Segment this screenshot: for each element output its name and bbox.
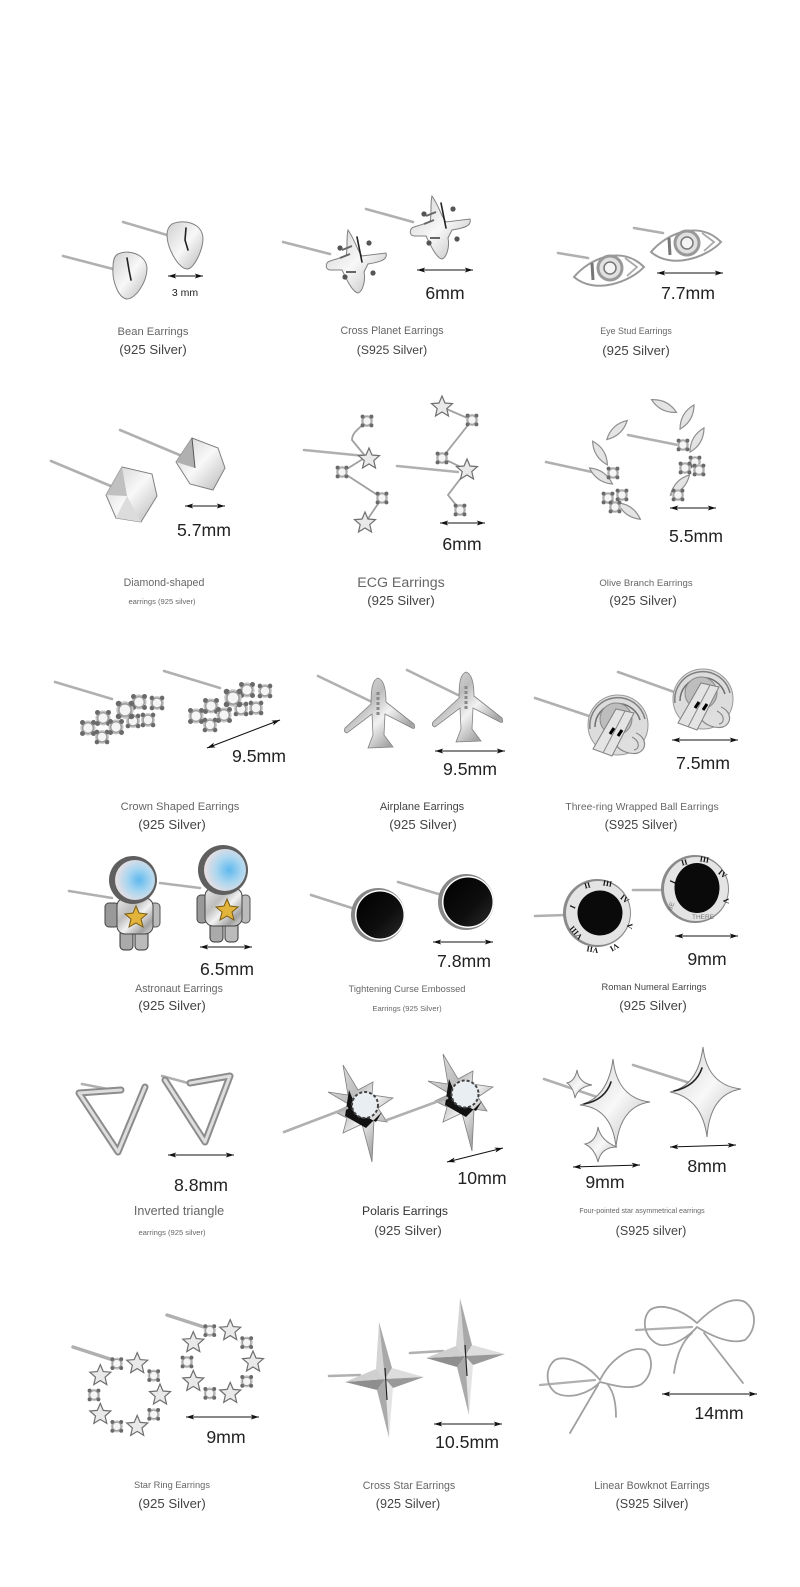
caption: four-pointed star asymmetrical earrings xyxy=(579,1207,705,1238)
measurement: 5.5mm xyxy=(669,508,723,546)
earrings: inverted triangle xyxy=(79,1076,230,1152)
caption: eye stud earrings: Eye Stud Earrings xyxy=(600,326,672,336)
measurement: 6mm xyxy=(440,523,485,554)
caption: linear bowknot earrings: Linear Bowknot Earrings xyxy=(594,1480,710,1492)
caption: roman numeral earrings: (925 Silver) xyxy=(619,998,687,1013)
measurement: 7.7mm: 7.7mm xyxy=(661,283,715,303)
caption: cross star earrings xyxy=(363,1480,455,1511)
earrings: olive branch xyxy=(546,396,707,522)
caption: crown shaped earrings xyxy=(121,801,240,832)
measurement: 5.7mm: 5.7mm xyxy=(177,520,231,540)
caption: cross planet earrings: (S925 Silver) xyxy=(357,343,427,357)
measurement: 6mm: 6mm xyxy=(425,283,465,303)
caption: three-ring wrapped ball earrings: (S925 Silver) xyxy=(605,818,677,832)
earrings: roman numeral: III xyxy=(699,854,710,865)
earrings: diamond-shaped xyxy=(51,430,225,522)
caption: three-ring wrapped ball earrings: Three-ring Wrapped Ball Earrings xyxy=(565,802,719,813)
caption: eye stud earrings xyxy=(600,326,672,358)
caption: inverted triangle earrings xyxy=(134,1204,224,1237)
caption: ECG earrings xyxy=(357,575,445,608)
caption: star ring earrings xyxy=(134,1480,210,1511)
earrings: black disc studs xyxy=(311,874,494,942)
caption: four-pointed star asymmetrical earrings: (S925 silver) xyxy=(616,1224,686,1238)
caption: roman numeral earrings: Roman Numeral Earrings xyxy=(602,982,707,992)
measurement: 6.5mm: 6.5mm xyxy=(200,959,254,979)
caption: crown shaped earrings: (925 Silver) xyxy=(138,817,206,832)
caption: polaris earrings xyxy=(362,1204,448,1238)
caption: inverted triangle earrings: Inverted triangle xyxy=(134,1204,224,1218)
earrings: roman numeral: IV xyxy=(618,893,631,906)
caption: tightening curse embossed earrings: Earrings (925 Silver) xyxy=(372,1004,442,1013)
earrings: roman numeral: THERE xyxy=(692,914,715,921)
earrings: cross star xyxy=(329,1298,505,1438)
measurement: 10mm xyxy=(447,1148,507,1188)
measurement: 7.7mm xyxy=(657,273,723,303)
caption: linear bowknot earrings xyxy=(594,1480,710,1511)
earrings: roman numeral: I xyxy=(668,879,677,885)
measurement: 8.8mm: 8.8mm xyxy=(174,1175,228,1195)
earrings: four-pointed star xyxy=(544,1047,741,1162)
caption: olive branch earrings: Olive Branch Earrings xyxy=(599,578,693,589)
caption: roman numeral earrings xyxy=(602,982,707,1013)
caption: tightening curse embossed earrings xyxy=(349,984,465,1013)
measurement: 6mm xyxy=(417,270,473,303)
caption: olive branch earrings xyxy=(599,578,693,608)
earrings: roman numeral: V xyxy=(625,923,634,930)
earrings: roman numeral: II xyxy=(680,857,689,868)
caption: crown shaped earrings: Crown Shaped Earrings xyxy=(121,801,240,813)
caption: ECG earrings: (925 Silver) xyxy=(367,593,435,608)
earrings: roman numeral: VII xyxy=(586,944,599,955)
caption: cross planet earrings: Cross Planet Earrings xyxy=(340,325,444,337)
measurement: 3 mm xyxy=(168,276,203,299)
measurement: 10.5mm: 10.5mm xyxy=(435,1432,499,1452)
caption: bean earrings xyxy=(118,326,189,357)
earrings: cross planet xyxy=(283,196,470,293)
measurement: 6.5mm xyxy=(200,947,254,979)
measurement: 5.7mm xyxy=(177,506,231,540)
caption: linear bowknot earrings: (S925 Silver) xyxy=(616,1497,688,1511)
measurement: 7.5mm xyxy=(672,740,738,773)
earrings: roman numeral: III xyxy=(602,878,613,889)
caption: tightening curse embossed earrings: Tightening Curse Embossed xyxy=(349,984,465,994)
measurement: 7.8mm xyxy=(433,942,493,971)
measurement: 9mm and 8mm: 9mm xyxy=(585,1172,625,1192)
measurement: 9mm: 9mm xyxy=(206,1427,246,1447)
caption: polaris earrings: (925 Silver) xyxy=(374,1223,442,1238)
measurement: 10mm: 10mm xyxy=(457,1168,507,1188)
earrings: ECG xyxy=(304,396,478,532)
measurement: 3 mm: 3 mm xyxy=(172,287,198,299)
caption: inverted triangle earrings: earrings (925 silver) xyxy=(138,1228,206,1237)
caption: star ring earrings: Star Ring Earrings xyxy=(134,1480,210,1490)
caption: polaris earrings: Polaris Earrings xyxy=(362,1204,448,1218)
earrings: eye stud xyxy=(558,228,721,286)
earrings: bean xyxy=(63,222,203,299)
measurement: 9.5mm xyxy=(207,720,286,766)
earrings: roman numeral: BE xyxy=(667,901,677,912)
caption: cross star earrings: (925 Silver) xyxy=(376,1497,440,1511)
earrings: three-ring wrapped ball xyxy=(535,669,733,756)
measurement: 7.8mm: 7.8mm xyxy=(437,951,491,971)
measurement: 9mm: 9mm xyxy=(687,949,727,969)
earrings: roman numeral: VI xyxy=(608,941,620,953)
caption: astronaut earrings: Astronaut Earrings xyxy=(135,983,223,995)
earrings: astronaut xyxy=(69,845,250,950)
earrings: airplane xyxy=(318,670,503,748)
measurement: 9mm xyxy=(675,936,738,969)
caption: diamond-shaped earrings: earrings (925 silver) xyxy=(128,597,196,606)
caption: eye stud earrings: (925 Silver) xyxy=(602,343,670,358)
measurement: 8.8mm xyxy=(168,1155,234,1195)
measurement: 5.5mm: 5.5mm xyxy=(669,526,723,546)
caption: olive branch earrings: (925 Silver) xyxy=(609,593,677,608)
measurement: 6mm: 6mm xyxy=(442,534,482,554)
caption: four-pointed star asymmetrical earrings: Four-pointed star asymmetrical earrings xyxy=(579,1207,705,1215)
earrings: roman numeral: VIII xyxy=(568,924,584,941)
measurement: 9mm and 8mm xyxy=(573,1145,736,1192)
caption: bean earrings: Bean Earrings xyxy=(118,326,189,338)
caption: three-ring wrapped ball earrings xyxy=(565,802,719,832)
measurement: 9.5mm: 9.5mm xyxy=(443,759,497,779)
measurement: 9.5mm: 9.5mm xyxy=(232,746,286,766)
earrings: polaris xyxy=(284,1054,493,1162)
caption: astronaut earrings xyxy=(135,983,223,1013)
earrings: roman numeral: II xyxy=(583,880,592,891)
caption: bean earrings: (925 Silver) xyxy=(119,342,187,357)
caption: airplane earrings: Airplane Earrings xyxy=(380,801,465,813)
measurement: 9mm xyxy=(186,1417,259,1447)
measurement: 9mm and 8mm: 8mm xyxy=(687,1156,727,1176)
earrings: roman numeral: I xyxy=(568,904,577,910)
caption: airplane earrings: (925 Silver) xyxy=(389,817,457,832)
earrings: roman numeral: V xyxy=(721,898,730,904)
measurement: 14mm: 14mm xyxy=(694,1403,744,1423)
earrings: linear bowknot xyxy=(540,1300,754,1433)
caption: star ring earrings: (925 Silver) xyxy=(138,1496,206,1511)
measurement: 7.5mm: 7.5mm xyxy=(676,753,730,773)
caption: cross star earrings: Cross Star Earrings xyxy=(363,1480,455,1492)
caption: airplane earrings xyxy=(380,801,465,832)
earrings: roman numeral: IV xyxy=(716,868,729,881)
measurement: 10.5mm xyxy=(434,1424,502,1452)
earrings: star ring xyxy=(73,1315,264,1435)
caption: cross planet earrings xyxy=(340,325,444,357)
measurement: 9.5mm xyxy=(435,751,505,779)
earrings: roman numeral xyxy=(535,854,730,955)
caption: astronaut earrings: (925 Silver) xyxy=(138,998,206,1013)
caption: ECG earrings: ECG Earrings xyxy=(357,575,445,591)
caption: diamond-shaped earrings xyxy=(124,577,204,606)
caption: diamond-shaped earrings: Diamond-shaped xyxy=(124,577,204,589)
earrings: crown shaped xyxy=(55,671,272,744)
measurement: 14mm xyxy=(662,1394,757,1423)
